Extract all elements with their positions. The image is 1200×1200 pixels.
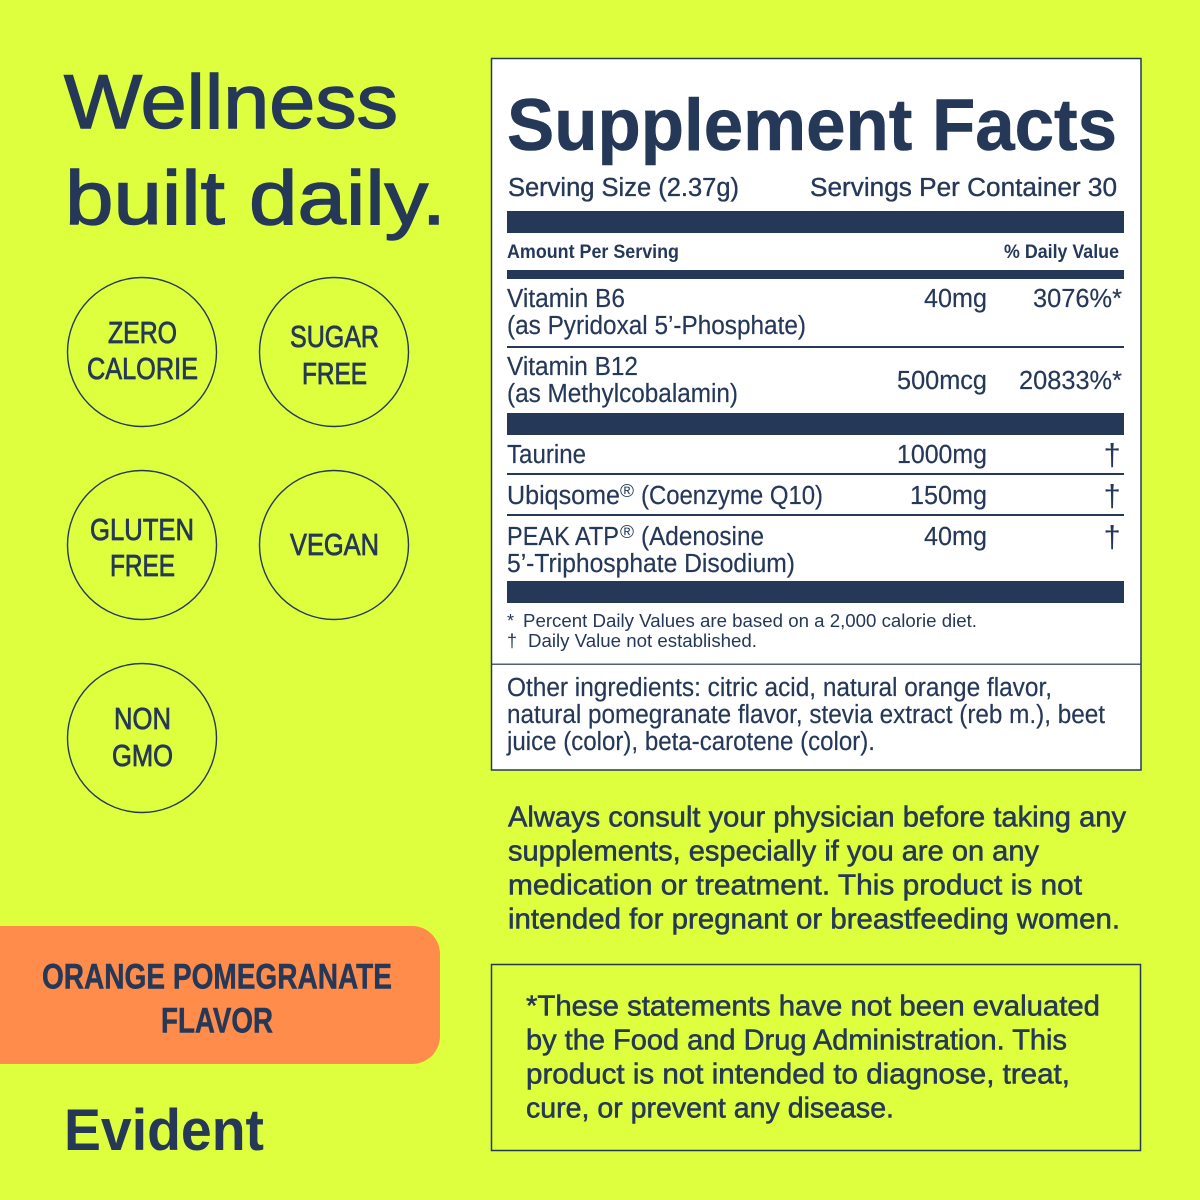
thick bars and rules bbox=[507, 211, 1124, 603]
flavor banner: FLAVOR bbox=[161, 1002, 273, 1040]
row: ubiqsome: (Coenzyme Q10) bbox=[641, 482, 823, 510]
table header bbox=[507, 242, 1119, 263]
text block: physician warning: supplements, especially if you are on any bbox=[508, 836, 1040, 868]
title: Wellness built daily bbox=[64, 60, 446, 241]
badge: non gmo bbox=[68, 664, 216, 812]
badge: sugar free: FREE bbox=[302, 356, 367, 391]
badges: product claims bbox=[68, 278, 408, 812]
row: vitamin B6 bbox=[507, 285, 1122, 340]
panel: supplement facts label bbox=[492, 58, 1141, 770]
other ingredients: juice (color), beta-carotene (color). bbox=[506, 728, 875, 756]
footnotes: Daily Value not established. bbox=[528, 631, 757, 651]
table header: % Daily Value bbox=[1004, 242, 1119, 263]
badge: gluten free bbox=[68, 470, 216, 620]
row: ubiqsome: Ubiqsome bbox=[507, 482, 620, 510]
footnotes: † bbox=[507, 631, 517, 651]
badge: vegan bbox=[260, 470, 408, 620]
row: ubiqsome: ® bbox=[620, 481, 634, 501]
panel: FDA disclaimer: by the Food and Drug Administration. This bbox=[526, 1024, 1067, 1056]
badge: gluten free: FREE bbox=[110, 548, 175, 583]
panel: FDA disclaimer: cure, or prevent any disease. bbox=[526, 1092, 894, 1124]
row: ubiqsome bbox=[507, 478, 1121, 513]
badge: vegan: VEGAN bbox=[290, 527, 379, 562]
panel: FDA disclaimer: *These statements have not been evaluated bbox=[526, 990, 1100, 1022]
row: vitamin B6: Vitamin B6 bbox=[507, 285, 625, 313]
serving info bbox=[508, 174, 1117, 202]
row: taurine: † bbox=[1104, 437, 1121, 472]
other ingredients bbox=[506, 674, 1105, 756]
brand logo: Evident: Evident bbox=[64, 1098, 264, 1163]
badge: non gmo: GMO bbox=[112, 738, 173, 773]
other ingredients: Other ingredients: citric acid, natural orange flavor, bbox=[507, 674, 1052, 702]
row: peak atp: 40mg bbox=[924, 523, 987, 551]
row: ubiqsome: † bbox=[1104, 478, 1121, 513]
table header: Amount Per Serving bbox=[507, 242, 679, 263]
panel: FDA disclaimer: product is not intended to diagnose, treat, bbox=[526, 1058, 1070, 1090]
serving info: Serving Size (2.37g) bbox=[508, 174, 739, 202]
row: peak atp bbox=[507, 519, 1121, 578]
row: vitamin B6: 40mg bbox=[924, 285, 987, 313]
serving info: Servings Per Container 30 bbox=[810, 174, 1117, 202]
title: Wellness built daily: Wellness bbox=[64, 60, 398, 145]
panel: FDA disclaimer bbox=[492, 964, 1140, 1150]
title: Wellness built daily: built daily. bbox=[65, 156, 446, 241]
row: peak atp: ® bbox=[620, 522, 634, 542]
row: vitamin B12: 20833%* bbox=[1019, 367, 1122, 395]
row: taurine: 1000mg bbox=[897, 441, 987, 469]
text block: physician warning bbox=[508, 802, 1127, 936]
badge: zero calorie: CALORIE bbox=[87, 351, 198, 386]
row: vitamin B6: 3076%* bbox=[1033, 285, 1122, 313]
row: vitamin B12: (as Methylcobalamin) bbox=[507, 380, 738, 408]
row: taurine: Taurine bbox=[507, 441, 586, 469]
footnotes bbox=[507, 611, 977, 651]
text block: physician warning: intended for pregnant or breastfeeding women. bbox=[508, 904, 1120, 936]
badge: sugar free: SUGAR bbox=[290, 319, 379, 354]
badge: sugar free bbox=[260, 278, 408, 426]
other ingredients: natural pomegranate flavor, stevia extract (reb m.), beet bbox=[507, 701, 1105, 729]
badge: non gmo: NON bbox=[114, 701, 171, 736]
footnotes: * bbox=[507, 611, 514, 631]
heading: Supplement Facts: Supplement Facts bbox=[507, 85, 1117, 166]
badge: gluten free: GLUTEN bbox=[90, 512, 194, 547]
footnotes: Percent Daily Values are based on a 2,000 calorie diet. bbox=[523, 611, 977, 631]
text block: physician warning: medication or treatment. This product is not bbox=[508, 870, 1082, 902]
row: ubiqsome: 150mg bbox=[910, 482, 987, 510]
row: vitamin B12: Vitamin B12 bbox=[507, 353, 638, 381]
badge: zero calorie: ZERO bbox=[108, 315, 177, 350]
badge: zero calorie bbox=[68, 278, 216, 426]
row: vitamin B12 bbox=[507, 353, 1122, 408]
row: peak atp: PEAK ATP bbox=[507, 523, 619, 551]
row: vitamin B6: (as Pyridoxal 5’-Phosphate) bbox=[507, 312, 806, 340]
row: taurine bbox=[507, 437, 1121, 472]
row: peak atp: (Adenosine bbox=[641, 523, 764, 551]
row: peak atp: 5’-Triphosphate Disodium) bbox=[507, 550, 795, 578]
flavor banner: ORANGE POMEGRANATE bbox=[42, 958, 392, 996]
row: peak atp: † bbox=[1104, 519, 1121, 554]
text block: physician warning: Always consult your physician before taking any bbox=[508, 802, 1127, 834]
row: vitamin B12: 500mcg bbox=[897, 367, 987, 395]
flavor banner bbox=[0, 926, 440, 1064]
